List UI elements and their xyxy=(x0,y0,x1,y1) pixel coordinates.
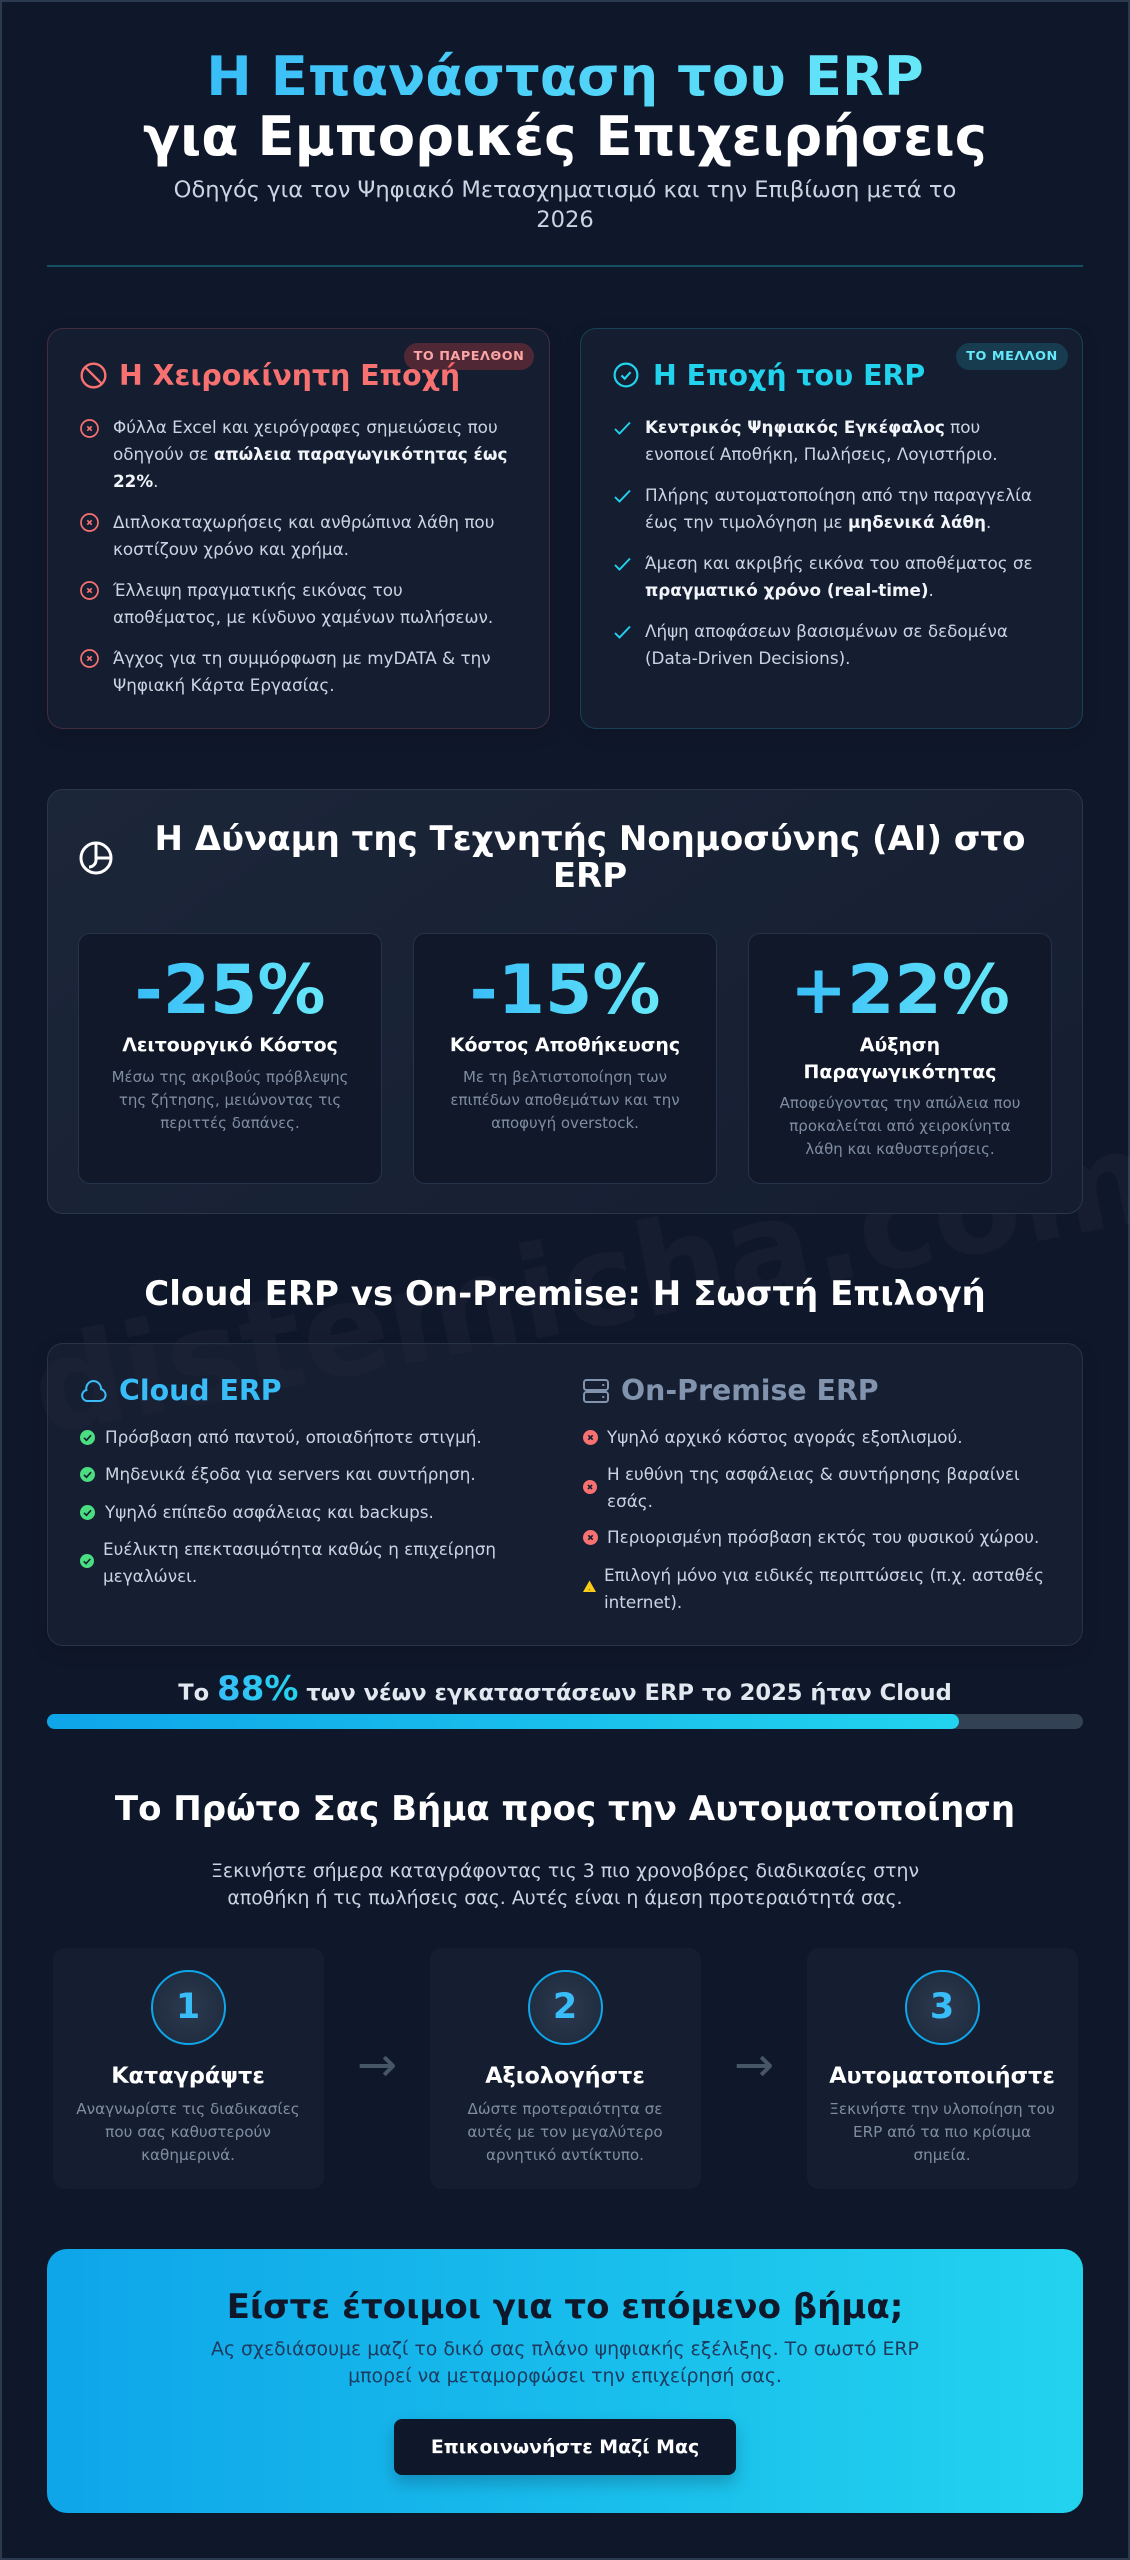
icon: x 2 xyxy=(80,513,99,532)
step name: Καταγράψτε xyxy=(111,2063,265,2089)
heading: manual era: Η Χειροκίνητη Εποχή xyxy=(119,359,460,392)
heading: cloud erp: Cloud ERP xyxy=(119,1374,282,1407)
list item 3 xyxy=(645,553,1033,600)
stat card 1: περιττές δαπάνες. xyxy=(160,1114,300,1132)
stat card 3: Αποφεύγοντας την απώλεια που xyxy=(780,1094,1020,1112)
number 1 xyxy=(150,1970,226,2045)
list item 4 xyxy=(604,1565,1044,1612)
step text: αρνητικό αντίκτυπο. xyxy=(486,2146,644,2164)
icon: warning xyxy=(583,1580,596,1592)
cta heading: Είστε έτοιμοι για το επόμενο βήμα; xyxy=(227,2287,903,2327)
list item 4: (Data-Driven Decisions). xyxy=(645,648,850,668)
list item 2: έως την τιμολόγηση με μηδενικά λάθη. xyxy=(645,512,991,532)
subtitle: Οδηγός για τον Ψηφιακό Μετασχηματισμό και την Επιβίωση μετά το xyxy=(174,177,956,203)
icon: check 3 xyxy=(614,558,631,571)
stat card 3 xyxy=(748,933,1052,1184)
list item 1: Φύλλα Excel και χειρόγραφες σημειώσεις που xyxy=(113,417,498,437)
step 2 xyxy=(430,1948,700,2189)
icon: x 4 xyxy=(80,649,99,668)
call to action panel xyxy=(47,2249,1083,2513)
icon: x 3 xyxy=(80,581,99,600)
list item 2: Πλήρης αυτοματοποίηση από την παραγγελία xyxy=(645,485,1032,505)
list item 2 xyxy=(113,512,494,559)
cta text: μπορεί να μεταμορφώσει την επιχείρησή σας. xyxy=(348,2365,782,2387)
step text: που σας καθυστερούν xyxy=(105,2123,271,2141)
step name: Αυτοματοποιήστε xyxy=(829,2063,1055,2089)
step 1 xyxy=(52,1948,324,2189)
list item 2: εσάς. xyxy=(607,1491,653,1511)
icon: check 4 xyxy=(80,1554,94,1568)
stat: 88 percent cloud: Το 88% των νέων εγκαταστάσεων ERP το 2025 ήταν Cloud xyxy=(178,1669,952,1709)
list item 1: οδηγούν σε απώλεια παραγωγικότητας έως xyxy=(113,444,507,464)
title: για Εμπορικές Επιχειρήσεις xyxy=(143,105,987,168)
step text: σημεία. xyxy=(913,2146,971,2164)
list item 2 xyxy=(607,1464,1020,1511)
step text: καθημερινά. xyxy=(141,2146,235,2164)
step text: Αναγνωρίστε τις διαδικασίες xyxy=(76,2100,300,2118)
number 3 xyxy=(904,1970,980,2045)
heading: on-premise erp: On-Premise ERP xyxy=(621,1374,879,1407)
title: Η Επανάσταση του ERP xyxy=(206,45,924,108)
step text: αυτές με τον μεγαλύτερο xyxy=(467,2123,663,2141)
heading: AI power xyxy=(155,819,1025,896)
list item 3: Υψηλό επίπεδο ασφάλειας και backups. xyxy=(105,1502,434,1522)
cta button xyxy=(394,2419,736,2475)
stat card 2: Με τη βελτιστοποίηση των xyxy=(463,1068,667,1086)
icon: check 1 xyxy=(80,1430,95,1445)
stat card 3: λάθη και καθυστερήσεις. xyxy=(805,1140,995,1158)
icon: check 3 xyxy=(80,1505,95,1520)
cta text xyxy=(47,2336,1083,2390)
cta text: Ας σχεδιάσουμε μαζί το δικό σας πλάνο ψηφιακής εξέλιξης. Το σωστό ERP xyxy=(211,2338,919,2360)
list item 2: κοστίζουν χρόνο και χρήμα. xyxy=(113,539,349,559)
stat card 1: Λειτουργικό Κόστος xyxy=(122,1034,338,1056)
step text xyxy=(467,2100,663,2164)
icon: x 1 xyxy=(80,419,99,438)
heading: AI power: Η Δύναμη της Τεχνητής Νοημοσύνης (AI) στο xyxy=(155,819,1025,859)
list item 3: Περιορισμένη πρόσβαση εκτός του φυσικού χώρου. xyxy=(607,1527,1039,1547)
stat card 1: της ζήτησης, μειώνοντας τις xyxy=(119,1091,341,1109)
step text: ERP από τα πιο κρίσιμα xyxy=(853,2123,1031,2141)
subtitle xyxy=(174,177,956,233)
number 1: 1 xyxy=(176,1987,200,2027)
list item 4 xyxy=(103,1539,496,1586)
number 2 xyxy=(528,1970,602,2045)
list item 4: Επιλογή μόνο για ειδικές περιπτώσεις (π.χ. ασταθές xyxy=(604,1565,1044,1585)
list item 1: ενοποιεί Αποθήκη, Πωλήσεις, Λογιστήριο. xyxy=(645,444,998,464)
step name: Αξιολογήστε xyxy=(485,2063,645,2089)
list item 3: Άμεση και ακριβής εικόνα του αποθέματος σε xyxy=(645,553,1033,573)
list item 2: Μηδενικά έξοδα για servers και συντήρηση. xyxy=(105,1464,476,1484)
icon: check circle xyxy=(614,362,638,388)
icon: x 1 xyxy=(583,1430,598,1445)
icon: check 4 xyxy=(614,626,631,639)
stat card 2 xyxy=(413,933,717,1184)
intro text xyxy=(211,1860,919,1909)
badge: future: ΤΟ ΜΕΛΛΟΝ xyxy=(966,349,1058,364)
title xyxy=(143,45,987,168)
number 3: 3 xyxy=(930,1987,954,2027)
panel: comparison xyxy=(47,1343,1083,1646)
intro text: Ξεκινήστε σήμερα καταγράφοντας τις 3 πιο χρονοβόρες διαδικασίες στην xyxy=(211,1860,919,1882)
badge: past xyxy=(404,343,534,370)
list item 4: Άγχος για τη συμμόρφωση με myDATA & την xyxy=(113,648,491,668)
stat card 3: Αύξηση xyxy=(860,1034,940,1056)
stat card 2: αποφυγή overstock. xyxy=(491,1114,639,1132)
list item 1 xyxy=(645,417,998,464)
stat card 1: Μέσω της ακριβούς πρόβλεψης xyxy=(112,1068,348,1086)
icon: ban xyxy=(80,362,106,388)
list item 3: πραγματικό χρόνο (real-time). xyxy=(645,580,934,600)
heading: first step: Το Πρώτο Σας Βήμα προς την Αυτοματοποίηση xyxy=(115,1789,1015,1829)
panel: erp era xyxy=(580,328,1083,729)
cta button: Επικοινωνήστε Μαζί Μας xyxy=(431,2436,699,2458)
icon: server xyxy=(583,1379,609,1403)
list item 3: Έλλειψη πραγματικής εικόνας του xyxy=(113,580,403,600)
list item 4 xyxy=(645,621,1008,668)
badge: past: ΤΟ ΠΑΡΕΛΘΟΝ xyxy=(414,349,524,364)
progress bar xyxy=(47,1714,1083,1729)
stat card 2: -15% xyxy=(470,951,660,1030)
subtitle: 2026 xyxy=(536,207,594,233)
list item 4: internet). xyxy=(604,1592,682,1612)
list item 2 xyxy=(645,485,1032,532)
watermark: distemicha.com xyxy=(20,1102,1130,1465)
list item 1: Πρόσβαση από παντού, οποιαδήποτε στιγμή. xyxy=(105,1427,482,1447)
heading: erp era: Η Εποχή του ERP xyxy=(653,359,925,392)
badge: future xyxy=(956,343,1068,370)
list item 4: μεγαλώνει. xyxy=(103,1566,197,1586)
list item 4: Ευέλικτη επεκτασιμότητα καθώς η επιχείρηση xyxy=(103,1539,496,1559)
icon: check 1 xyxy=(614,422,631,435)
stat card 3: Παραγωγικότητας xyxy=(804,1061,996,1083)
list item 1 xyxy=(113,417,507,491)
icon: x 3 xyxy=(583,1530,598,1545)
number 2: 2 xyxy=(553,1987,577,2027)
stat card 1 xyxy=(78,933,382,1184)
icon: check 2 xyxy=(80,1467,95,1482)
list item 1: Κεντρικός Ψηφιακός Εγκέφαλος που xyxy=(645,417,980,437)
stat card 2: επιπέδων αποθεμάτων και την xyxy=(450,1091,680,1109)
step text: Ξεκινήστε την υλοποίηση του xyxy=(829,2100,1055,2118)
step text xyxy=(829,2100,1055,2164)
list item 1: Υψηλό αρχικό κόστος αγοράς εξοπλισμού. xyxy=(607,1427,963,1447)
icon: check 2 xyxy=(614,490,631,503)
stat card 1: -25% xyxy=(134,951,325,1030)
list item 4 xyxy=(113,648,491,695)
stat card 2: Κόστος Αποθήκευσης xyxy=(450,1034,680,1056)
list item 4: Λήψη αποφάσεων βασισμένων σε δεδομένα xyxy=(645,621,1008,641)
panel: manual era xyxy=(47,328,550,729)
icon: cloud xyxy=(81,1380,107,1402)
step 3 xyxy=(806,1948,1078,2189)
progress fill xyxy=(47,1714,959,1729)
stat card 3: +22% xyxy=(790,951,1010,1030)
arrow 2: → xyxy=(734,2037,774,2093)
panel: AI power xyxy=(47,789,1083,1214)
list item 3 xyxy=(112,580,493,627)
list item 4: Ψηφιακή Κάρτα Εργασίας. xyxy=(113,675,335,695)
list item 1: 22%. xyxy=(113,471,159,491)
heading: cloud vs on-premise: Cloud ERP vs On-Premise: Η Σωστή Επιλογή xyxy=(144,1274,986,1314)
intro text: αποθήκη ή τις πωλήσεις σας. Αυτές είναι η άμεση προτεραιότητά σας. xyxy=(227,1887,903,1909)
icon: pie chart xyxy=(80,842,112,874)
icon: x 2 xyxy=(583,1480,597,1494)
stat card 3: προκαλείται από χειροκίνητα xyxy=(789,1117,1011,1135)
step text xyxy=(76,2100,300,2164)
list item 2: Διπλοκαταχωρήσεις και ανθρώπινα λάθη που xyxy=(113,512,494,532)
arrow 1: → xyxy=(357,2037,397,2093)
list item 3: αποθέματος, με κίνδυνο χαμένων πωλήσεων. xyxy=(113,607,493,627)
list item 2: Η ευθύνη της ασφάλειας & συντήρησης βαραίνει xyxy=(607,1464,1020,1484)
step text: Δώστε προτεραιότητα σε xyxy=(467,2100,662,2118)
heading: AI power: ERP xyxy=(553,856,627,896)
